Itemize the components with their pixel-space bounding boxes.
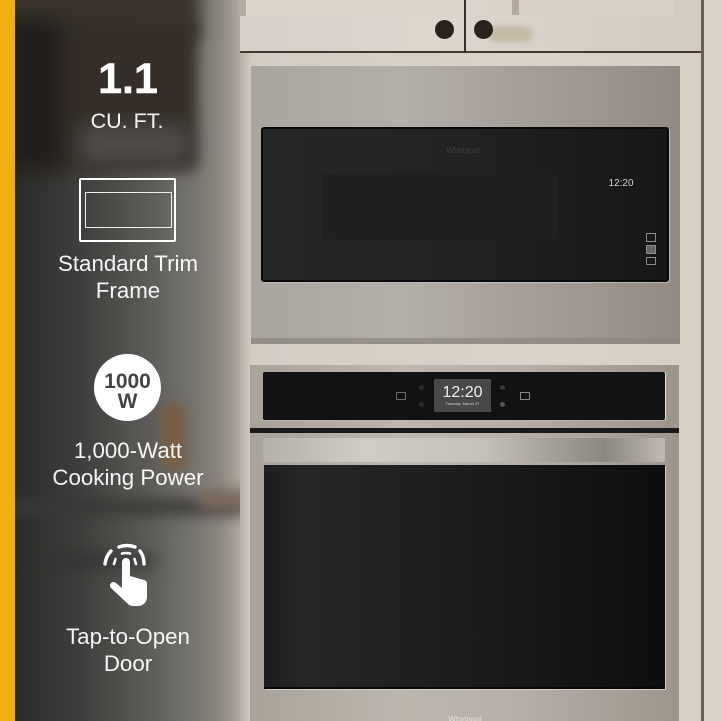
cabinet right edge line xyxy=(701,0,704,721)
knob shadow xyxy=(488,26,532,42)
panel: blurred kitchen background xyxy=(15,0,240,721)
panel: microwave xyxy=(251,66,680,344)
microwave vent strip xyxy=(251,338,680,344)
oven display xyxy=(434,379,491,412)
icon: 1000 W badge: W xyxy=(118,390,137,413)
oven small dots xyxy=(419,385,424,390)
cabinet column background xyxy=(240,0,721,721)
oven right icon xyxy=(520,392,530,400)
label: standard trim frame xyxy=(58,251,198,302)
panel: wall oven xyxy=(250,365,679,721)
door gap xyxy=(464,0,466,53)
oven handle xyxy=(263,438,665,462)
knob right xyxy=(474,20,493,39)
oven left icon xyxy=(396,392,406,400)
oven gap xyxy=(250,428,679,433)
microwave door xyxy=(261,127,669,282)
microwave buttons xyxy=(646,233,656,265)
microwave window xyxy=(323,174,558,239)
stat: capacity unit: CU. FT. xyxy=(91,109,163,133)
oven control panel xyxy=(263,372,665,420)
door recess left xyxy=(239,0,444,16)
door recess right xyxy=(512,0,675,15)
stat: capacity number: 1.1 xyxy=(98,55,158,103)
icon: trim frame xyxy=(79,178,176,242)
label: cooking power: 1,000-Watt xyxy=(74,438,182,463)
microwave logo: Whirlpool xyxy=(446,146,480,155)
microwave clock: 12:20 xyxy=(608,178,634,189)
accent bar xyxy=(0,0,15,721)
label: cooking power xyxy=(52,438,204,490)
label: tap-to-open door: Tap-to-Open xyxy=(66,624,190,649)
label: standard trim frame: Frame xyxy=(96,278,160,302)
icon: 1000 W badge xyxy=(94,354,161,421)
icon: 1000 W badge: 1000 xyxy=(104,370,151,393)
oven door window xyxy=(264,465,665,689)
label: tap-to-open door: Door xyxy=(104,650,152,676)
inner frame xyxy=(84,192,172,228)
label: cooking power: Cooking Power xyxy=(52,464,204,490)
label: tap-to-open door xyxy=(66,624,190,676)
icon: tap gesture xyxy=(103,544,147,606)
oven clock: 12:20 xyxy=(442,384,483,401)
label: standard trim frame: Standard Trim xyxy=(58,251,198,276)
panel: upper cabinet doors xyxy=(240,0,702,53)
oven date: Tuesday, March 27 xyxy=(446,401,479,406)
panel: right side strip xyxy=(704,0,721,721)
knob left xyxy=(435,20,454,39)
